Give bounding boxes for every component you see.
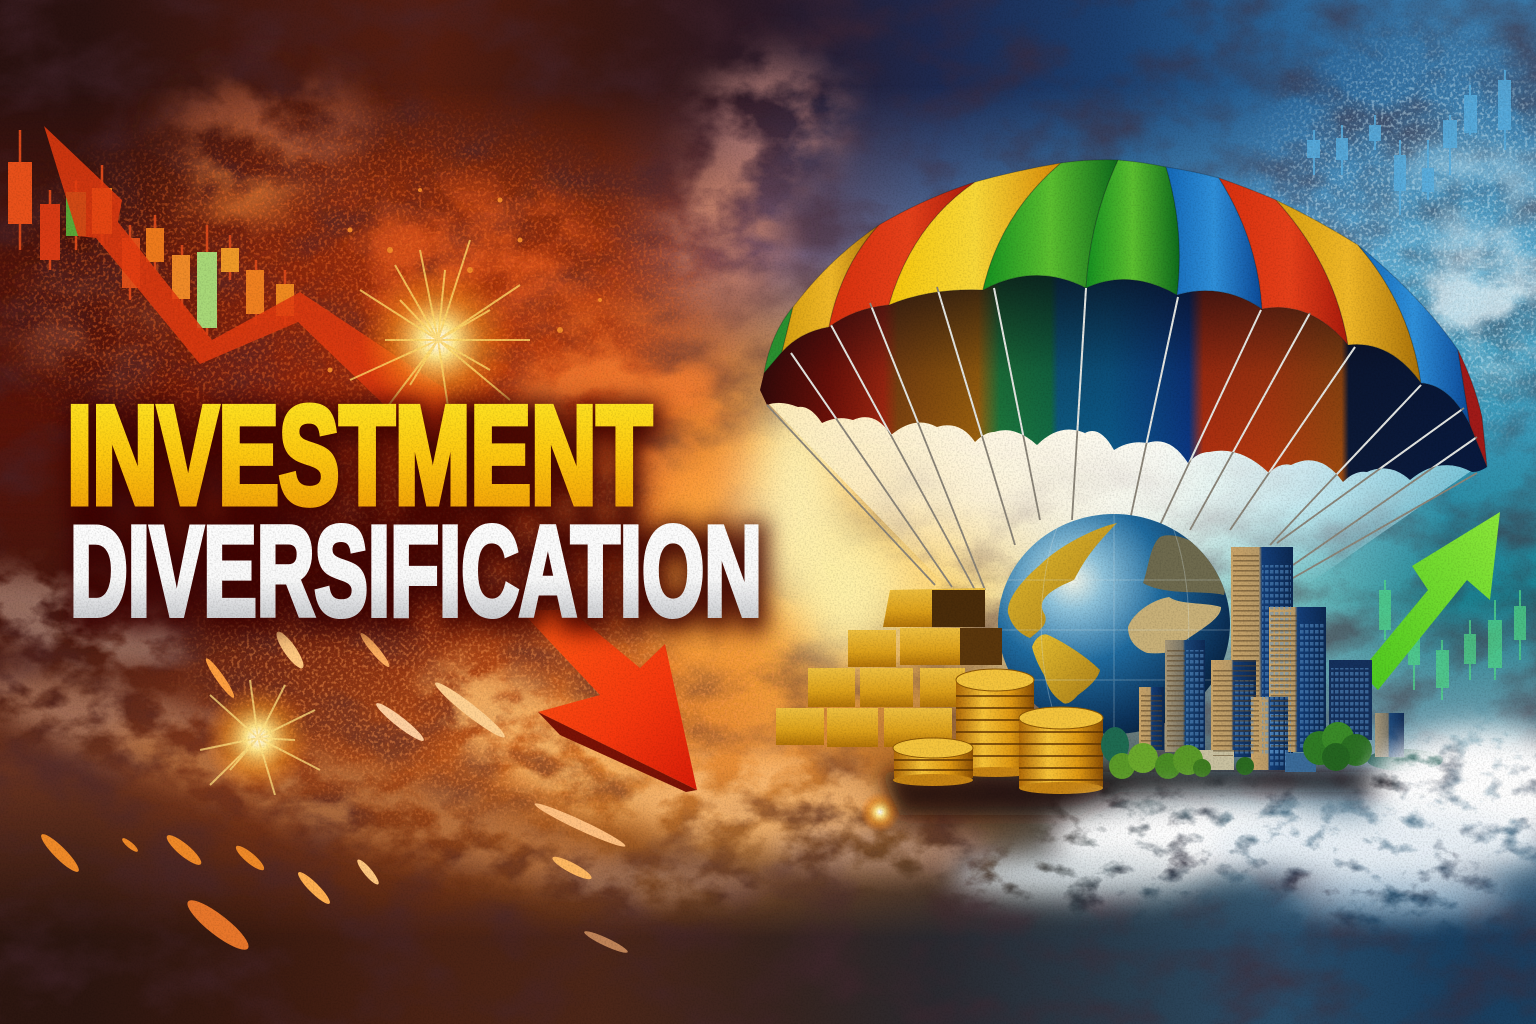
orange and pink smoke, upper left [10,60,840,540]
heading line: DIVERSIFICATION: DIVERSIFICATION [70,500,762,642]
title shadow: INVESTMENT [70,383,655,538]
spark bursts [200,240,900,832]
title [67,378,765,647]
candlestick chart: falling, top left [8,130,294,335]
fine orange speckle [10,50,1536,820]
title shadow [70,383,765,647]
suspension lines [767,287,1477,590]
candlestick chart: rising, lower right [1379,580,1526,700]
title shadow: DIVERSIFICATION [73,505,765,647]
central glow [650,390,910,680]
bright light below the canopy [765,400,1487,590]
canopy gores [764,160,1487,467]
suspension lines inside the canopy [767,288,1476,475]
gold bars [776,588,1002,747]
globe [998,510,1230,740]
white clouds, upper right [1390,150,1536,360]
canopy underside [755,260,1490,485]
trees [1109,722,1372,779]
red zig-zag arrow descending behind the title [44,126,697,792]
gold coin stacks [893,669,1103,794]
candlestick chart: rising, top right [1307,70,1511,215]
parachute [755,160,1490,590]
smoke bands, lower left [0,550,990,917]
trees behind city [1101,727,1443,771]
flying embers [37,188,629,956]
green rising arrow [1360,512,1500,690]
dark ground below coins and city [880,772,1400,815]
city buildings [1139,547,1404,772]
white clouds, lower right [950,729,1536,913]
heading line: INVESTMENT: INVESTMENT [67,378,652,533]
